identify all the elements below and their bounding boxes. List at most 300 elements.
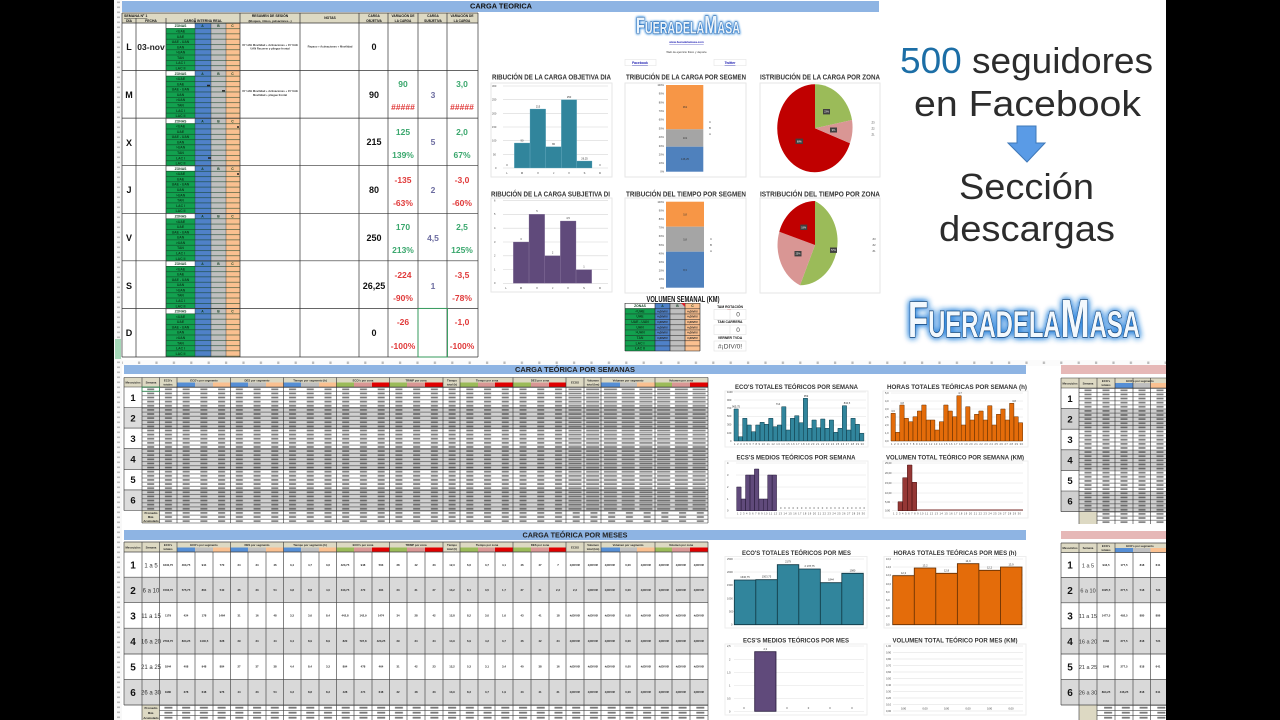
subjective load values: 3 (431, 90, 436, 100)
chart: load by segment: 146,25 (681, 157, 690, 161)
chart: load by segment: 20% (659, 152, 665, 156)
chart: objective load by day: X (537, 171, 539, 175)
monthly values: #¡DIV/0! (659, 690, 669, 694)
pace and summary boxes: 0 (736, 312, 740, 318)
monthly values: #¡DIV/0! (694, 588, 704, 592)
chart: load by segment: 10% (659, 161, 665, 165)
website links: www.fueradelamasa.com (668, 40, 704, 44)
chart: time by zone pie: Z1 (872, 249, 876, 253)
chart: load by segment (625, 72, 746, 177)
monthly values: 575,75 (182, 588, 191, 592)
chart: load by zone pie: Z3 (871, 120, 875, 124)
chart: total hours per week: 1 2 3 4 5 6 7 8 9 10 11 12 13 14 15 16 17 18 19 20 21 22 23 24 25 26 27 28 29 30 (891, 442, 1024, 446)
panel: partial monthly table on the right: 4 (1067, 637, 1073, 648)
week ranges: 6 a 10 (143, 588, 160, 594)
monthly summary rows: Máx. (148, 711, 154, 715)
monthly values: 464 (379, 664, 384, 668)
chart: total hours per week: 3,0 (885, 407, 889, 411)
chart: total hours per week (883, 383, 1028, 447)
monthly values: 408 (184, 664, 189, 668)
chart: total hours per week: 2,5 (885, 415, 889, 419)
panel: partial monthly table on the right: 886 (1156, 614, 1161, 618)
table header: OBJETIVA (366, 19, 383, 23)
header row: ECO's por segmento (190, 543, 218, 547)
week ranges: 26 a 30 (141, 690, 162, 696)
chart: time by segment (625, 190, 746, 293)
chart: objective load by day: D (599, 171, 601, 175)
monthly values: 43 (520, 614, 524, 618)
chart: load by zone pie: 9% (832, 129, 836, 132)
panel: weekly training load table: TAN (177, 199, 184, 203)
monthly values: 484 (379, 588, 384, 592)
subjective variation: 67% (453, 150, 471, 160)
panel: weekly training load table: LAC II (176, 114, 185, 118)
chart: total volume per week: 10,00 (885, 491, 892, 495)
panel: partial monthly table on the right: ECO's (1102, 544, 1111, 548)
panel: partial monthly table on the right (1061, 531, 1166, 720)
chart: total ECOs per week: 0 (730, 439, 732, 443)
monthly values: 178 (202, 614, 207, 618)
monthly values: 3,6 (326, 563, 330, 567)
panel: partial monthly table on the right: 277,5 (1120, 664, 1128, 668)
panel: partial monthly table on the right: totales (1101, 548, 1111, 552)
header row: ECO's por segmento (190, 378, 218, 382)
header row: Tiempo por segmento (h) (293, 543, 327, 547)
chart: total hours per month: 12,3 (901, 571, 907, 575)
chart: total hours per month: HORAS TOTALES TEÓRICAS POR MES (h) (894, 549, 1016, 557)
chart: objective load by day: 0 (599, 163, 601, 167)
panel: weekly volume table: #¡DIV/0! (687, 320, 698, 324)
chart: total volume per month: 0,80 (886, 657, 892, 661)
heading: downloads section: descargas (939, 208, 1115, 249)
pace and summary boxes: 0 (736, 327, 740, 334)
chart: total ECOs per month: 2500 (727, 557, 733, 561)
monthly values: #¡DIV/0! (659, 614, 669, 618)
chart: subjective load by day: D (599, 286, 601, 290)
load variation: 90 (398, 79, 408, 89)
table header: RESUMEN DE SESIÓN (252, 13, 289, 18)
chart: load by segment: 70% (659, 109, 665, 113)
chart: objective load by day: J (553, 171, 555, 175)
monthly values: #¡DIV/0! (694, 690, 704, 694)
chart: objective load by day: V (568, 171, 570, 175)
panel: weekly training load table (122, 13, 478, 357)
chart: average ECOs per month: 0 (829, 706, 831, 710)
objective load values: 0 (371, 328, 377, 338)
monthly values: #¡DIV/0! (676, 639, 686, 643)
chart: objective load by day: 250 (492, 98, 497, 102)
monthly values: 3,7 (502, 639, 506, 643)
monthly values: #¡DIV/0! (588, 563, 598, 567)
monthly values: 423,25 (377, 639, 386, 643)
chart: total hours per month: 0,0 (886, 623, 890, 627)
monthly values: #¡DIV/0! (570, 563, 580, 567)
monthly values: 28 (414, 614, 418, 618)
monthly values: #¡DIV/0! (641, 690, 651, 694)
chart: total ECOs per month: 1980 (850, 568, 856, 572)
chart: total ECOs per week: 834,5 (844, 401, 851, 405)
header row: DES por segmento (244, 378, 270, 382)
table header: VARIACIÓN DE (392, 13, 414, 18)
pace and summary boxes (714, 304, 746, 351)
panel: weekly volume table: #¡DIV/0! (687, 336, 698, 340)
table header: CARGA (427, 14, 440, 18)
monthly values: 424 (184, 614, 189, 618)
chart: objective load by day: L (506, 171, 508, 175)
chart: total volume per week: 20,00 (885, 471, 892, 475)
monthly values: 37 (255, 664, 259, 668)
chart: total volume per month: 0,40 (886, 683, 892, 687)
chart: time by segment: B (710, 243, 712, 247)
panel: weekly volume table: LAC I (636, 341, 644, 345)
chart: objective load by day: 100 (492, 139, 497, 143)
load variation (391, 79, 416, 351)
monthly values: 3,5 (485, 588, 489, 592)
monthly values: 478 (361, 664, 366, 668)
session summaries: Movilidad + pliegue frontal (253, 93, 287, 97)
monthly values: 0,00 (625, 614, 631, 618)
panel: weekly training load table: TAN (177, 294, 184, 298)
header row: ECOS (571, 546, 579, 550)
monthly values: 1440,5 (200, 639, 209, 643)
chart: objective load by day: M (521, 171, 523, 175)
panel: partial monthly table on the right: 21 a 25 (1079, 665, 1097, 671)
monthly values: 5,3 (467, 664, 471, 668)
panel: partial monthly table on the right: 277,5 (1120, 639, 1128, 643)
load variation: -224 (394, 270, 412, 280)
monthly values: 944 (202, 563, 207, 567)
chart: time by segment: TRIBUCIÓN DEL TIEMPO POR SEGMEN (626, 190, 746, 198)
header row: totales (163, 547, 173, 551)
header row: Semana (146, 380, 157, 384)
chart: total ECOs per month (725, 549, 867, 628)
chart: load by segment: TRIBUCIÓN DE LA CARGA POR SEGMEN (626, 72, 746, 82)
zone labels: >UAN (176, 51, 186, 55)
panel: weekly training load table: LAC II (176, 352, 185, 356)
monthly values: 1503,75 (163, 588, 173, 592)
mesocycle numbers: 4 (130, 637, 136, 648)
monthly values: 37 (520, 588, 524, 592)
chart: objective load by day: 150 (492, 125, 497, 129)
table header: FECHA (145, 19, 157, 23)
panel: partial monthly table on the right: 818 (1140, 664, 1145, 668)
chart: total hours per week: 4,7 (958, 391, 962, 395)
chart: time by segment: 5,8 (683, 212, 687, 216)
panel: weekly training load table: UAE - UAN (172, 325, 190, 329)
monthly values: 13,9 (449, 690, 455, 694)
monthly values: 34 (432, 639, 436, 643)
objective load values: 0 (371, 42, 377, 52)
panel: partial weekly table on the right: ECO's por segmento (1126, 379, 1154, 383)
chart: total volume per month: 0,00 (901, 706, 907, 710)
panel: weekly volume table: A (661, 304, 664, 308)
chart: time by zone pie: 25% (796, 253, 801, 256)
chart: total volume per week: 1 2 3 4 5 6 7 8 9 10 11 12 13 14 15 16 17 18 19 20 21 22 23 24 25 26 27 28 29 30 (893, 512, 1022, 516)
panel: weekly volume table: UAE (636, 315, 644, 319)
chart: objective load by day: S (584, 171, 586, 175)
website links (625, 40, 746, 66)
chart: average ECOs per week: 0 0 0 0 0 0 0 0 0 0 0 0 0 0 0 0 0 0 0 0 0 (780, 506, 866, 510)
chart: total volume per week: 15,00 (885, 481, 892, 485)
chart: total ECOs per month: 1640,75 (740, 575, 750, 579)
subjective load values (427, 90, 439, 291)
chart: average ECOs per month: 2 (729, 658, 731, 662)
chart: load by segment: B (709, 126, 711, 130)
subjective load values: 1 (431, 281, 436, 291)
chart: subjective load by day: X (536, 286, 538, 290)
panel: weekly training load table: <UAE (176, 77, 186, 81)
panel: weekly training load table: <UAE (176, 267, 186, 271)
session summaries: Repaso + Activaciones + Movilidad (308, 44, 353, 48)
chart: load by segment: 40% (659, 135, 665, 139)
panel: weekly training load table: B (217, 167, 220, 171)
monthly values: #¡DIV/0! (588, 664, 598, 668)
monthly values: #¡DIV/0! (641, 639, 651, 643)
chart: total ECOs per week (725, 383, 868, 447)
day letters: L (126, 42, 132, 52)
chart: total hours per month: 14,0 (886, 565, 892, 569)
header row: total (km) (587, 382, 599, 386)
zone labels: LAC I (176, 61, 185, 65)
panel: partial monthly table on the right: 943,5 (1102, 563, 1110, 567)
mesocycle numbers (130, 560, 136, 699)
panel: partial monthly table on the right: 641 (1156, 690, 1161, 694)
zone labels: A (201, 24, 204, 28)
panel: partial weekly table on the right: ECO's (1102, 379, 1111, 383)
monthly values: #¡DIV/0! (659, 664, 669, 668)
monthly summary rows: Acumulado (143, 716, 159, 720)
panel: weekly volume table: <UAE (635, 309, 645, 313)
monthly values: 33 (432, 690, 436, 694)
monthly values: 1,6 (502, 614, 506, 618)
monthly values: 48 (414, 690, 418, 694)
table header: SEMANA Nº 1 (124, 14, 147, 18)
monthly values: 423,75 (341, 563, 350, 567)
chart: subjective load by day: 4 (494, 226, 496, 230)
panel: partial monthly table on the right: Mesociclos (1062, 546, 1078, 550)
monthly values: 27 (237, 664, 241, 668)
monthly values: 3,0 (485, 614, 489, 618)
chart: load by segment: 0% (660, 170, 665, 174)
header row: ECO's (164, 543, 173, 547)
mesocycle numbers: 1 (130, 393, 136, 404)
monthly values: #¡DIV/0! (605, 639, 615, 643)
chart: total volume per month: 0,60 (886, 670, 892, 674)
header row (124, 542, 708, 552)
chart: time by segment: 0% (660, 286, 665, 290)
monthly values: 3,8 (290, 588, 294, 592)
monthly summary rows: Promedio (145, 706, 158, 710)
panel: weekly volume table: #¡DIV/0! (687, 315, 698, 319)
chart: total hours per week: 1,0 (885, 431, 889, 435)
chart: load by segment: 80% (659, 100, 665, 104)
mesocycle numbers: 2 (130, 414, 136, 424)
session summaries: UAN Recorrer y pliegue frontal (250, 46, 290, 50)
panel: weekly training load table: LAC II (176, 209, 185, 213)
zone labels: <UAE (176, 30, 186, 34)
day letters: D (126, 328, 133, 338)
chart: average ECOs per month: 2,5 (727, 644, 731, 648)
panel: weekly training load table: UAE (177, 177, 185, 181)
monthly values: 4,4 (290, 664, 294, 668)
chart: total hours per week: 3,6 (891, 409, 895, 413)
panel: weekly training load table: UAN (177, 236, 185, 240)
chart: total ECOs per month: 1503,75 (762, 575, 772, 579)
table header: VARIACIÓN DE (451, 13, 473, 18)
monthly values: 41 (538, 614, 542, 618)
monthly values: 24 (237, 563, 241, 567)
subjective variation: 3,0 (456, 79, 468, 89)
table header: NOTAS (324, 16, 337, 20)
load variation: -100% (391, 341, 416, 351)
monthly values: 31 (396, 664, 400, 668)
load variation: 213% (392, 245, 414, 255)
chart: subjective load by day: 0 (494, 281, 496, 285)
arrow: down to downloads (1008, 126, 1045, 162)
chart: objective load by day: 26,25 (581, 156, 588, 160)
chart: total hours per month: 6,0 (886, 598, 890, 602)
monthly values: 463,75 (182, 563, 191, 567)
monthly values: #¡DIV/0! (588, 690, 598, 694)
chart: time by segment: A (710, 249, 712, 253)
header row: DES por segmento (244, 543, 270, 547)
chart: time by segment: 10% (659, 277, 665, 281)
chart: total hours per month: 13,2 (922, 564, 928, 568)
monthly values: 884 (220, 664, 225, 668)
chart: load by segment: 100% (657, 83, 665, 87)
panel: weekly training load table: B (217, 72, 220, 76)
chart: total ECOs per week: 714 (776, 402, 781, 406)
chart: total hours per week: 0,0 (885, 439, 889, 443)
week ranges: 21 a 25 (141, 665, 162, 671)
panel: weekly training load table: >UAN (176, 336, 186, 340)
monthly values: 29 (237, 639, 241, 643)
monthly values: 34 (396, 614, 400, 618)
panel: partial monthly table on the right: 641 (1156, 563, 1161, 567)
monthly values: #¡DIV/0! (676, 563, 686, 567)
panel: weekly training load table: <UAE (176, 220, 186, 224)
monthly values: 42 (414, 563, 418, 567)
monthly values: 47 (538, 563, 542, 567)
monthly values: 42 (414, 664, 418, 668)
monthly values: 378 (184, 690, 189, 694)
monthly values: #¡DIV/0! (641, 614, 651, 618)
chart: load by zone pie: Z1 (871, 132, 875, 136)
panel: partial monthly table on the right: 880 (1140, 614, 1145, 618)
chart: total ECOs per week: 700 (727, 406, 732, 410)
panel: weekly training load table: UAN (177, 188, 185, 192)
monthly values: 42 (538, 639, 542, 643)
objective load values: 90 (369, 90, 379, 100)
panel: partial weekly table on the right: Mesociclos (1062, 382, 1078, 386)
objective load values (363, 42, 385, 338)
monthly values: #¡DIV/0! (570, 664, 580, 668)
chart: average ECOs per month: 0 (786, 706, 788, 710)
table header: (Bloques, ritmos, pulsaciones...) (248, 19, 292, 23)
heading: 500 followers promotion: 500 seguidores (900, 40, 1153, 81)
panel: weekly training load table: ZONAS (175, 167, 187, 171)
monthly values (163, 563, 704, 694)
header row (124, 378, 708, 387)
panel: weekly training load table: LAC I (176, 252, 185, 256)
monthly values: #¡DIV/0! (676, 690, 686, 694)
week ranges: 11 a 15 (141, 614, 161, 620)
panel: weekly data table (124, 378, 708, 523)
panel: weekly training load table: UAE - UAN (172, 278, 190, 282)
chart: time by segment: 80% (659, 217, 665, 221)
panel: weekly training load table: LAC II (176, 257, 185, 261)
panel: weekly training load table: >UAN (176, 241, 186, 245)
monthly values: 2703,75 (163, 639, 173, 643)
header row: Volumen por zona (669, 378, 693, 382)
chart: average ECOs per month: 1,5 (727, 670, 731, 674)
header row: DES por zona (531, 378, 550, 382)
monthly values: 13,2 (449, 588, 455, 592)
monthly values: #¡DIV/0! (605, 563, 615, 567)
table header: CARGA INTERNA REAL (184, 19, 222, 23)
chart: time by zone pie: Z2 (872, 243, 876, 247)
monthly values: 3,4 (290, 639, 294, 643)
chart: time by segment: 60% (659, 234, 665, 238)
monthly values: #¡DIV/0! (659, 563, 669, 567)
zone labels: C (231, 24, 234, 28)
header row: ECO's por zona (353, 543, 374, 547)
header row: Tiempo por zona (476, 378, 499, 382)
header row: Volumen por segmento (613, 543, 644, 547)
monthly values: 46 (520, 639, 524, 643)
monthly values: 470 (361, 588, 366, 592)
monthly values: 31 (556, 690, 560, 694)
chart: subjective load by day: S (583, 286, 585, 290)
chart: average ECOs per month: 0 (851, 706, 853, 710)
panel: weekly training load table: TAN (177, 151, 184, 155)
monthly values: #¡DIV/0! (605, 690, 615, 694)
chart: average ECOs per month (725, 636, 867, 715)
monthly values: 0,00 (625, 639, 631, 643)
chart: average ECOs per week: ECS'S MEDIOS TEÓRICOS POR SEMANA (736, 454, 856, 462)
panel: weekly training load table: LAC I (176, 299, 185, 303)
chart: total hours per week: 5,0 (885, 391, 889, 395)
chart: total volume per month: 0,00 (922, 706, 928, 710)
panel: weekly training load table: A (201, 262, 204, 266)
chart: subjective load by day: J (552, 286, 554, 290)
chart: objective load by day: 250 (567, 95, 572, 99)
monthly values: 0,00 (625, 664, 631, 668)
monthly values: #¡DIV/0! (570, 614, 580, 618)
panel: weekly training load table: >UAN (176, 288, 186, 292)
pace and summary boxes: TAM CARRERA (718, 320, 743, 324)
panel: weekly training load table: A (201, 167, 204, 171)
chart: total volume per month: 0,90 (886, 650, 892, 654)
panel: weekly training load table: ZONAS (175, 119, 187, 123)
chart: objective load by day: RIBUCIÓN DE LA CARGA OBJETIVA DIA (492, 72, 611, 82)
panel: weekly training load table: C (231, 262, 234, 266)
chart: total hours per month: 4,0 (886, 606, 890, 610)
chart: load by zone pie: Z2 (871, 126, 875, 130)
monthly values: 16 (556, 664, 560, 668)
monthly values: 4,0 (326, 588, 330, 592)
chart: time by zone pie: Z3 (872, 237, 876, 241)
monthly values: 3,3 (290, 690, 294, 694)
chart: average ECOs per month: 1 (729, 684, 731, 688)
objective load values: 250 (366, 233, 382, 243)
panel: partial monthly table on the right: 5 (1067, 662, 1073, 674)
monthly values: 23 (432, 664, 436, 668)
panel: partial weekly table on the right: Semana (1083, 382, 1094, 386)
panel: weekly training load table: ZONAS (175, 310, 187, 314)
panel: weekly volume table: >UAN (635, 331, 645, 335)
chart: objective load by day: 80 (552, 142, 556, 146)
